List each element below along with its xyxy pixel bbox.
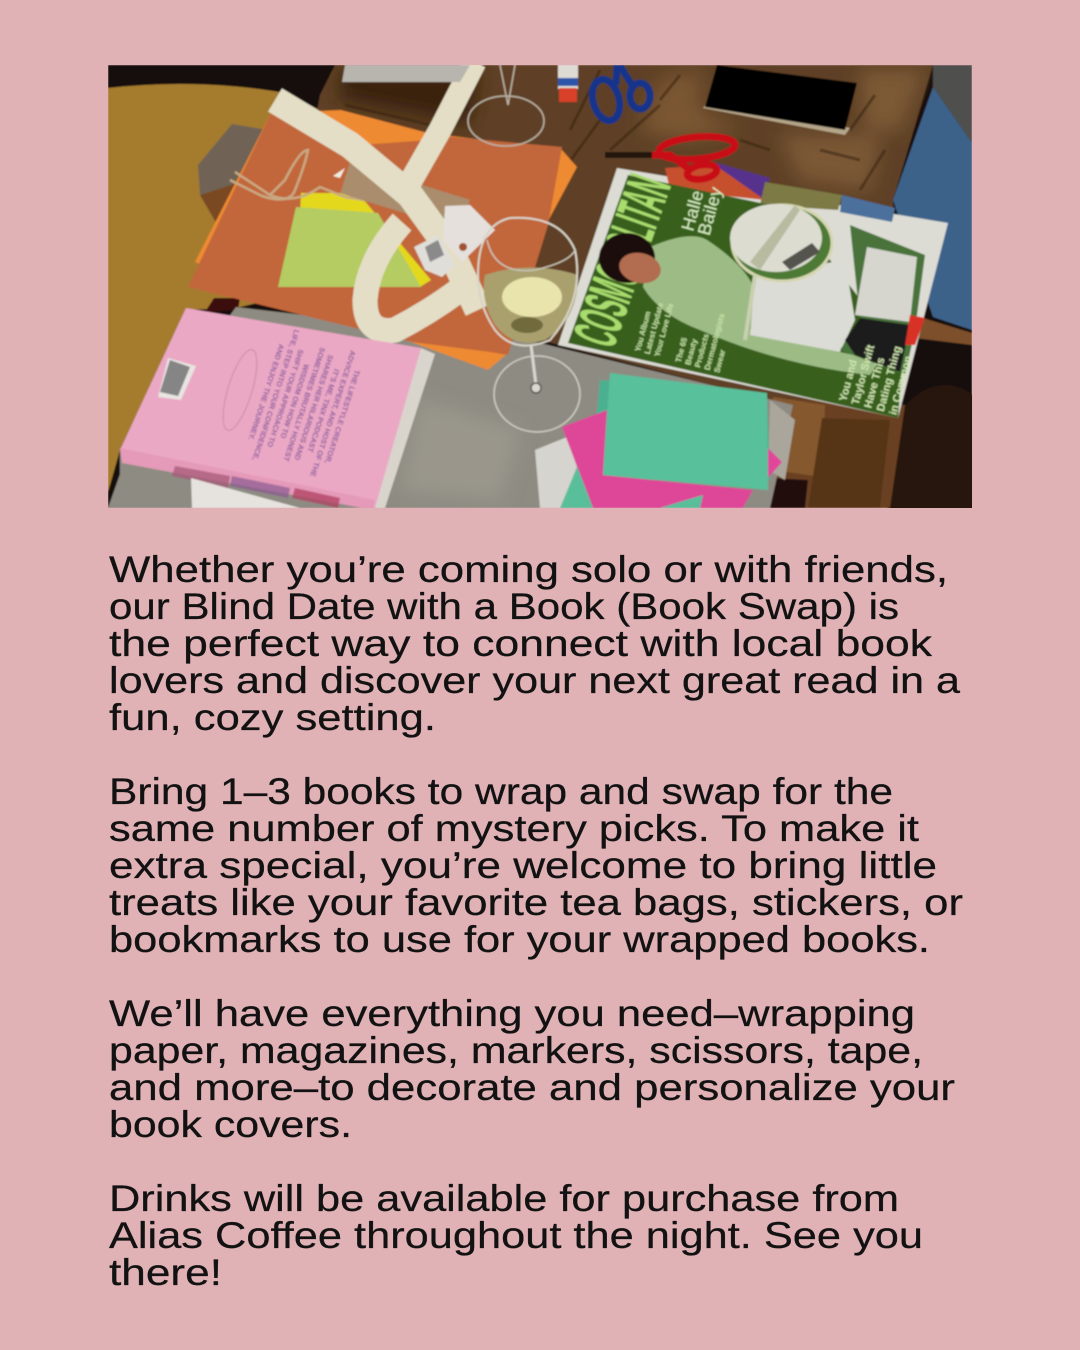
red scissors (652, 134, 736, 181)
couch: mustard chair (108, 84, 340, 492)
blue couch (893, 87, 972, 330)
paragraph: drinks: Alias Coffee throughout the night. See you (109, 1215, 923, 1256)
book blurb: IT’S ME, TINX PODCAST (305, 368, 341, 454)
book blurb: WISDOM ON HOW TO (278, 363, 311, 440)
cover lines: Dermatologists (703, 312, 727, 371)
book blurb: SHIFT YOUR APPROACH TO (265, 348, 305, 448)
terracotta paper (188, 113, 562, 355)
book blurb: AND ENJOY THE JOURNEY. (246, 343, 286, 441)
body copy (109, 549, 963, 1293)
cover (568, 175, 903, 418)
main wine glass (478, 218, 580, 432)
paragraph: intro: fun, cozy setting. (109, 697, 436, 738)
book blurb: LIFE, STEP INTO YOUR CONFIDENCE, (250, 329, 301, 462)
paragraph: what to bring: extra special, you’re welcome to bring little (109, 845, 937, 886)
yellow paper (300, 193, 431, 287)
magazine: Taylor Swift (850, 343, 877, 406)
magazine: in Common (888, 354, 915, 416)
green paper (278, 207, 421, 287)
magazine (558, 163, 948, 418)
wood tone washes (340, 70, 925, 190)
barcode (158, 358, 196, 400)
cover lines: Beauty (683, 337, 699, 366)
spine title (172, 466, 340, 508)
cover lines: You Album (633, 310, 653, 353)
photo: craft supplies on a table (108, 65, 972, 508)
paragraph: what to bring (109, 771, 963, 960)
woman: face (618, 252, 662, 284)
paragraph: intro: Whether you’re coming solo or with friends, (109, 549, 948, 590)
twine spool (345, 178, 465, 215)
grey couch corner (933, 65, 972, 143)
paragraph: intro: lovers and discover your next great read in a (109, 660, 960, 701)
paragraph: drinks (109, 1178, 923, 1293)
scrap paper at top (342, 65, 470, 82)
cover lines: Latest Update (643, 301, 665, 355)
marble table (108, 307, 793, 508)
back page (558, 168, 948, 418)
scrap white paper (535, 437, 577, 508)
cover lines: Your Love Life (653, 302, 676, 358)
wood grain (345, 70, 885, 190)
red tear (905, 315, 925, 345)
book blurb: SOMETIMES BRUTALLY HONEST (281, 346, 327, 463)
cover lines (633, 293, 736, 374)
paragraph: supplies: paper, magazines, markers, scissors, tape, (109, 1030, 923, 1071)
tape: cream ribbon (275, 62, 478, 331)
magazine: You and (837, 359, 860, 403)
phone (703, 65, 857, 135)
right page photo (750, 260, 855, 352)
cover headline (678, 180, 726, 237)
glue stick (558, 65, 578, 102)
magazine: Have This (862, 356, 887, 410)
cover lines: Products (693, 332, 711, 369)
pink book (120, 308, 435, 510)
ribbon spool (730, 204, 832, 340)
orange underlay paper (195, 110, 577, 370)
woman: hair (599, 233, 655, 283)
book blurb: ADVICE EXPERT, AND HOST OF THE (308, 349, 358, 478)
photo collage strip (665, 163, 895, 222)
cover lines: Swear (712, 349, 727, 374)
price tags (414, 205, 495, 277)
paragraph: what to bring: treats like your favorite tea bags, stickers, or (109, 882, 963, 923)
cover lines: The 65 (674, 336, 689, 363)
book blurb: SHARES HER HILARIOUS AND (292, 354, 335, 462)
paragraph: intro: our Blind Date with a Book (Book Swap) is (109, 586, 899, 627)
paragraph: intro: the perfect way to connect with local book (109, 623, 933, 664)
paragraph: intro (109, 549, 960, 738)
woman: coat (643, 236, 880, 375)
lower wood leg (770, 398, 905, 508)
paragraph: supplies: and more–to decorate and personalize your (109, 1067, 955, 1108)
receipt (855, 247, 917, 322)
paragraph: drinks: Drinks will be available for purchase from (109, 1178, 899, 1219)
paragraph: what to bring: Bring 1–3 books to wrap and swap for the (109, 771, 893, 812)
paragraph: what to bring: same number of mystery picks. To make it (109, 808, 920, 849)
book blurb (248, 329, 360, 478)
page canvas (108, 65, 972, 1286)
craft papers (560, 373, 782, 508)
paragraph: what to bring: bookmarks to use for your wrapped books. (109, 919, 930, 960)
cover headline: Bailey (694, 185, 726, 237)
dark stool (902, 346, 918, 406)
paragraph: supplies: We’ll have everything you need–wrapping (109, 993, 915, 1034)
magazine: Dating Thing (875, 345, 904, 413)
paragraph: drinks: there! (109, 1252, 222, 1293)
blue scissors (588, 65, 650, 124)
copper band (915, 318, 972, 345)
book blurb: THE LIFESTYLE CREATOR, (323, 369, 362, 465)
dark blade (605, 152, 652, 158)
grey wood block (198, 124, 263, 196)
paragraph: supplies: book covers. (109, 1104, 352, 1145)
wood table top (316, 65, 934, 401)
paragraph: supplies (109, 993, 955, 1145)
cover headline: Halle (678, 188, 707, 233)
twine string (230, 150, 365, 200)
top wine glass (468, 65, 544, 146)
